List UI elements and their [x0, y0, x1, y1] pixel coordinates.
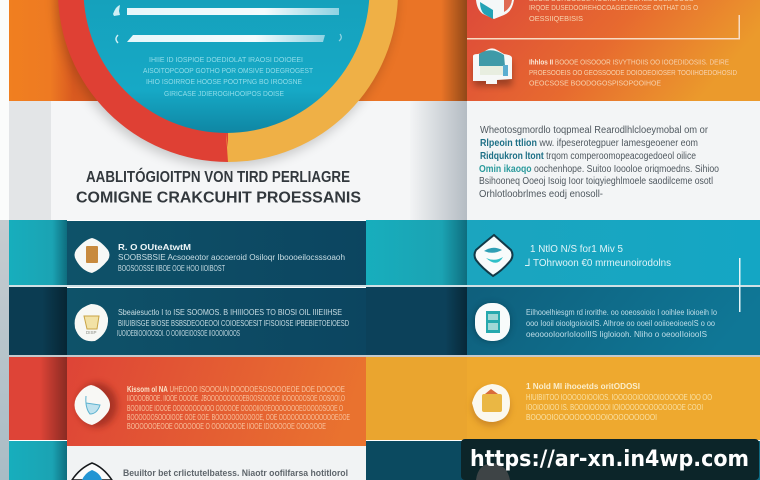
panel: top orange band — [9, 0, 467, 101]
text block: top right card 2 — [529, 58, 737, 88]
text block: row 3 left: BOOIIOOE IOOOE OOOOOOOOIOO OOOOOE OOOOIIOOEOOOOOOOEOOOOOSOOE O — [127, 404, 343, 413]
icon: row 3 right sandwich — [472, 384, 510, 426]
panel: row 1 — [9, 220, 760, 286]
panel: row 2 — [9, 287, 760, 355]
text block: white band paragraph — [479, 125, 719, 200]
heading: AABLITÓGIOITPN VON TIRD PERLIAGRE — [86, 168, 350, 186]
icon: row 2 left folder: DISP — [86, 330, 97, 335]
icon: row 2 right tablet — [474, 303, 510, 341]
icon: card 1 box — [476, 0, 514, 19]
circle text: GIRICASE JDIEROGIHOOIPOS DOISE — [164, 91, 284, 98]
text block: white band paragraph: Bsihooneq Ooeoj Isoig Ioor toiqyieghlmoele saodilceme osotl — [479, 176, 713, 187]
text block: row 3 right — [526, 382, 712, 422]
panel: row 4 — [9, 441, 760, 480]
panel: top right red-orange cards — [467, 0, 760, 101]
circle text: IHIO ISOIRROE HOOSE POOTPNG BO IROOSNE — [146, 79, 302, 86]
text block: row 4 left: Beuiltor bet crlictutelbatess. Niaotr oofilfarsa hotitlorol — [123, 468, 348, 478]
panel: row 3 — [9, 357, 760, 446]
text block: top right card 1: OESSIIQEBISIS — [529, 14, 583, 23]
icon: row 3 left bowl — [74, 383, 117, 427]
text block: top right card 2: Ihhlos II BOOOE OISOOOR ISVYTHOIIS OO IOOEDIDOSIIS. DEIRE — [529, 58, 729, 66]
chart: large circle with red and yellow ring — [56, 0, 398, 166]
text block: row 1 left: BOOSOOSSE IIBOE OOE HOO IIOIBOST — [118, 264, 225, 273]
heading — [76, 168, 361, 206]
circle text — [143, 57, 314, 98]
text block: row 3 left: BOOOOOOSOOOIOOE OOE OOE. BOOOOOOOOOOOE, OOE OOOOOOOOOOOOOOEOOE — [127, 413, 350, 422]
panel: white middle band — [9, 101, 760, 220]
bars in circle — [113, 5, 341, 43]
watermark url bar: https://ar-xn.in4wp.com — [470, 447, 749, 472]
text block: row 3 left — [127, 385, 350, 431]
text block: row 1 right: 1 NtlO N/S for1 Miv 5 — [530, 244, 623, 255]
text block: top right card 1 — [529, 0, 698, 23]
text block: row 3 left: BOOOOOOEOOE OOOOOOE O OOOOOOOE IIOOE IDOOOOOE OOOOOOE — [127, 422, 326, 431]
left margin strip — [0, 0, 9, 480]
text block: top right card 1: IRQOE DUSEDOOREHOCOAGEDEROSE ONTHAT OIS O — [529, 3, 698, 12]
circle text: IHIIE ID IOSPIOE DOEDIOLAT IRAOSI DOIOEEI — [149, 57, 303, 64]
text block: row 2 right — [526, 308, 717, 339]
icon: monitor — [473, 48, 512, 86]
row separators — [9, 258, 760, 358]
text block: row 1 right: ⅃ TOhrwoon €0 mrmeunoirodolns — [525, 258, 671, 269]
text block: white band paragraph: Rlpeoin ttlion ww. ifpeserotegpuer Iamesgeoener eom — [480, 138, 698, 149]
text block: top right card 2: OEOCSOSE BOODOGOSPISOPOOIHOE — [529, 78, 661, 88]
text block: row 3 left: Kissom ol NA UHEOOO ISOOOUN DOODOESOSOOOEOE DOE DOOOOE — [127, 385, 345, 394]
icon: row 1 left document — [74, 238, 110, 273]
text block: white band paragraph: Orhlotloobrlmes eodj enosoll- — [479, 189, 603, 200]
text block: row 2 left: Sbeaiesuctlo I to ISE SOOMOS. B IHIIIOOES TO BIOSI OIL IIIEIIHSE — [118, 308, 342, 317]
text block: row 2 left — [117, 308, 349, 338]
text block: row 2 left: IUOIOEBIOOIOOSOI. O OOIIOEIOOSOE IIOOOIOIOOS — [117, 329, 240, 338]
circle text: AISOITOPCOOP GOTHO POR OMSIVE DOEGROGEST — [143, 68, 314, 75]
icon: bottom right badge behind watermark — [476, 465, 510, 480]
text block: white band paragraph: Ridqukron ltont trqom comperoomopeacogedoeol oilice — [480, 151, 696, 162]
text block: row 2 right: Eilhooelhiesgm rd irorithe. oo ooeosoioio I ooihlee Iioioeih Io — [526, 308, 717, 317]
text block: row 3 left: IIOOOOBOOE. IIOOE OOOOE. JBOOOOOOOOOEBOOSOOOOE IOOOOOOSOE OOSOOI,O — [127, 394, 345, 403]
text block: row 2 right: ooo Iooil oioolgoioioiIS. Alhroe oo ooeil ooiioeoioeoIS o oo — [526, 319, 716, 328]
text block: row 1 right — [525, 244, 671, 269]
text block: row 2 right: oeooooIoorIoIooIIIS Iigloiooh. Nliho o oeooIIoiooIS — [526, 330, 707, 339]
text block: row 3 right: 1 Nold Ml ihooetds oritODOSI — [526, 382, 640, 391]
watermark url bar — [461, 439, 759, 480]
text block: row 3 right: BOOOOIOOOOOOOOOOIOOOOOOOOOI — [526, 413, 657, 422]
text block: white band paragraph: Wheotosgmordlo toqpmeal Rearodlhlcloeymobal om or — [480, 125, 709, 136]
text block: row 2 left: BIIUIBISGE BIOSE BSBSDEOOEOOI COIOESOESIT IFISOIOSE IPBEBIETOEIOESD — [118, 319, 349, 328]
text block: row 1 left: SOOBSBSIE Acsooeotor aocoeroid Osiloqr Iboooeilocsssoaoh — [118, 253, 345, 262]
icon: row 4 left badge — [72, 463, 112, 480]
text block: row 1 left — [118, 242, 345, 273]
text block: row 3 right: IOOIOOIOO IS. BOOOIOOOOI IOIOOOOOOOOOOOOOE COOI — [526, 403, 703, 412]
icon: row 1 right s-badge — [474, 235, 512, 276]
icon: row 2 left folder — [75, 304, 108, 341]
text block: row 1 left: R. O OUteAtwtM — [118, 242, 191, 252]
text block: white band paragraph: Omin ikaoqo oochenhope. Suitoo Ioooloe oriqmoedns. Sihioo — [479, 164, 719, 175]
heading: COMIGNE CRAKCUHIT PROESSANIS — [76, 190, 361, 206]
